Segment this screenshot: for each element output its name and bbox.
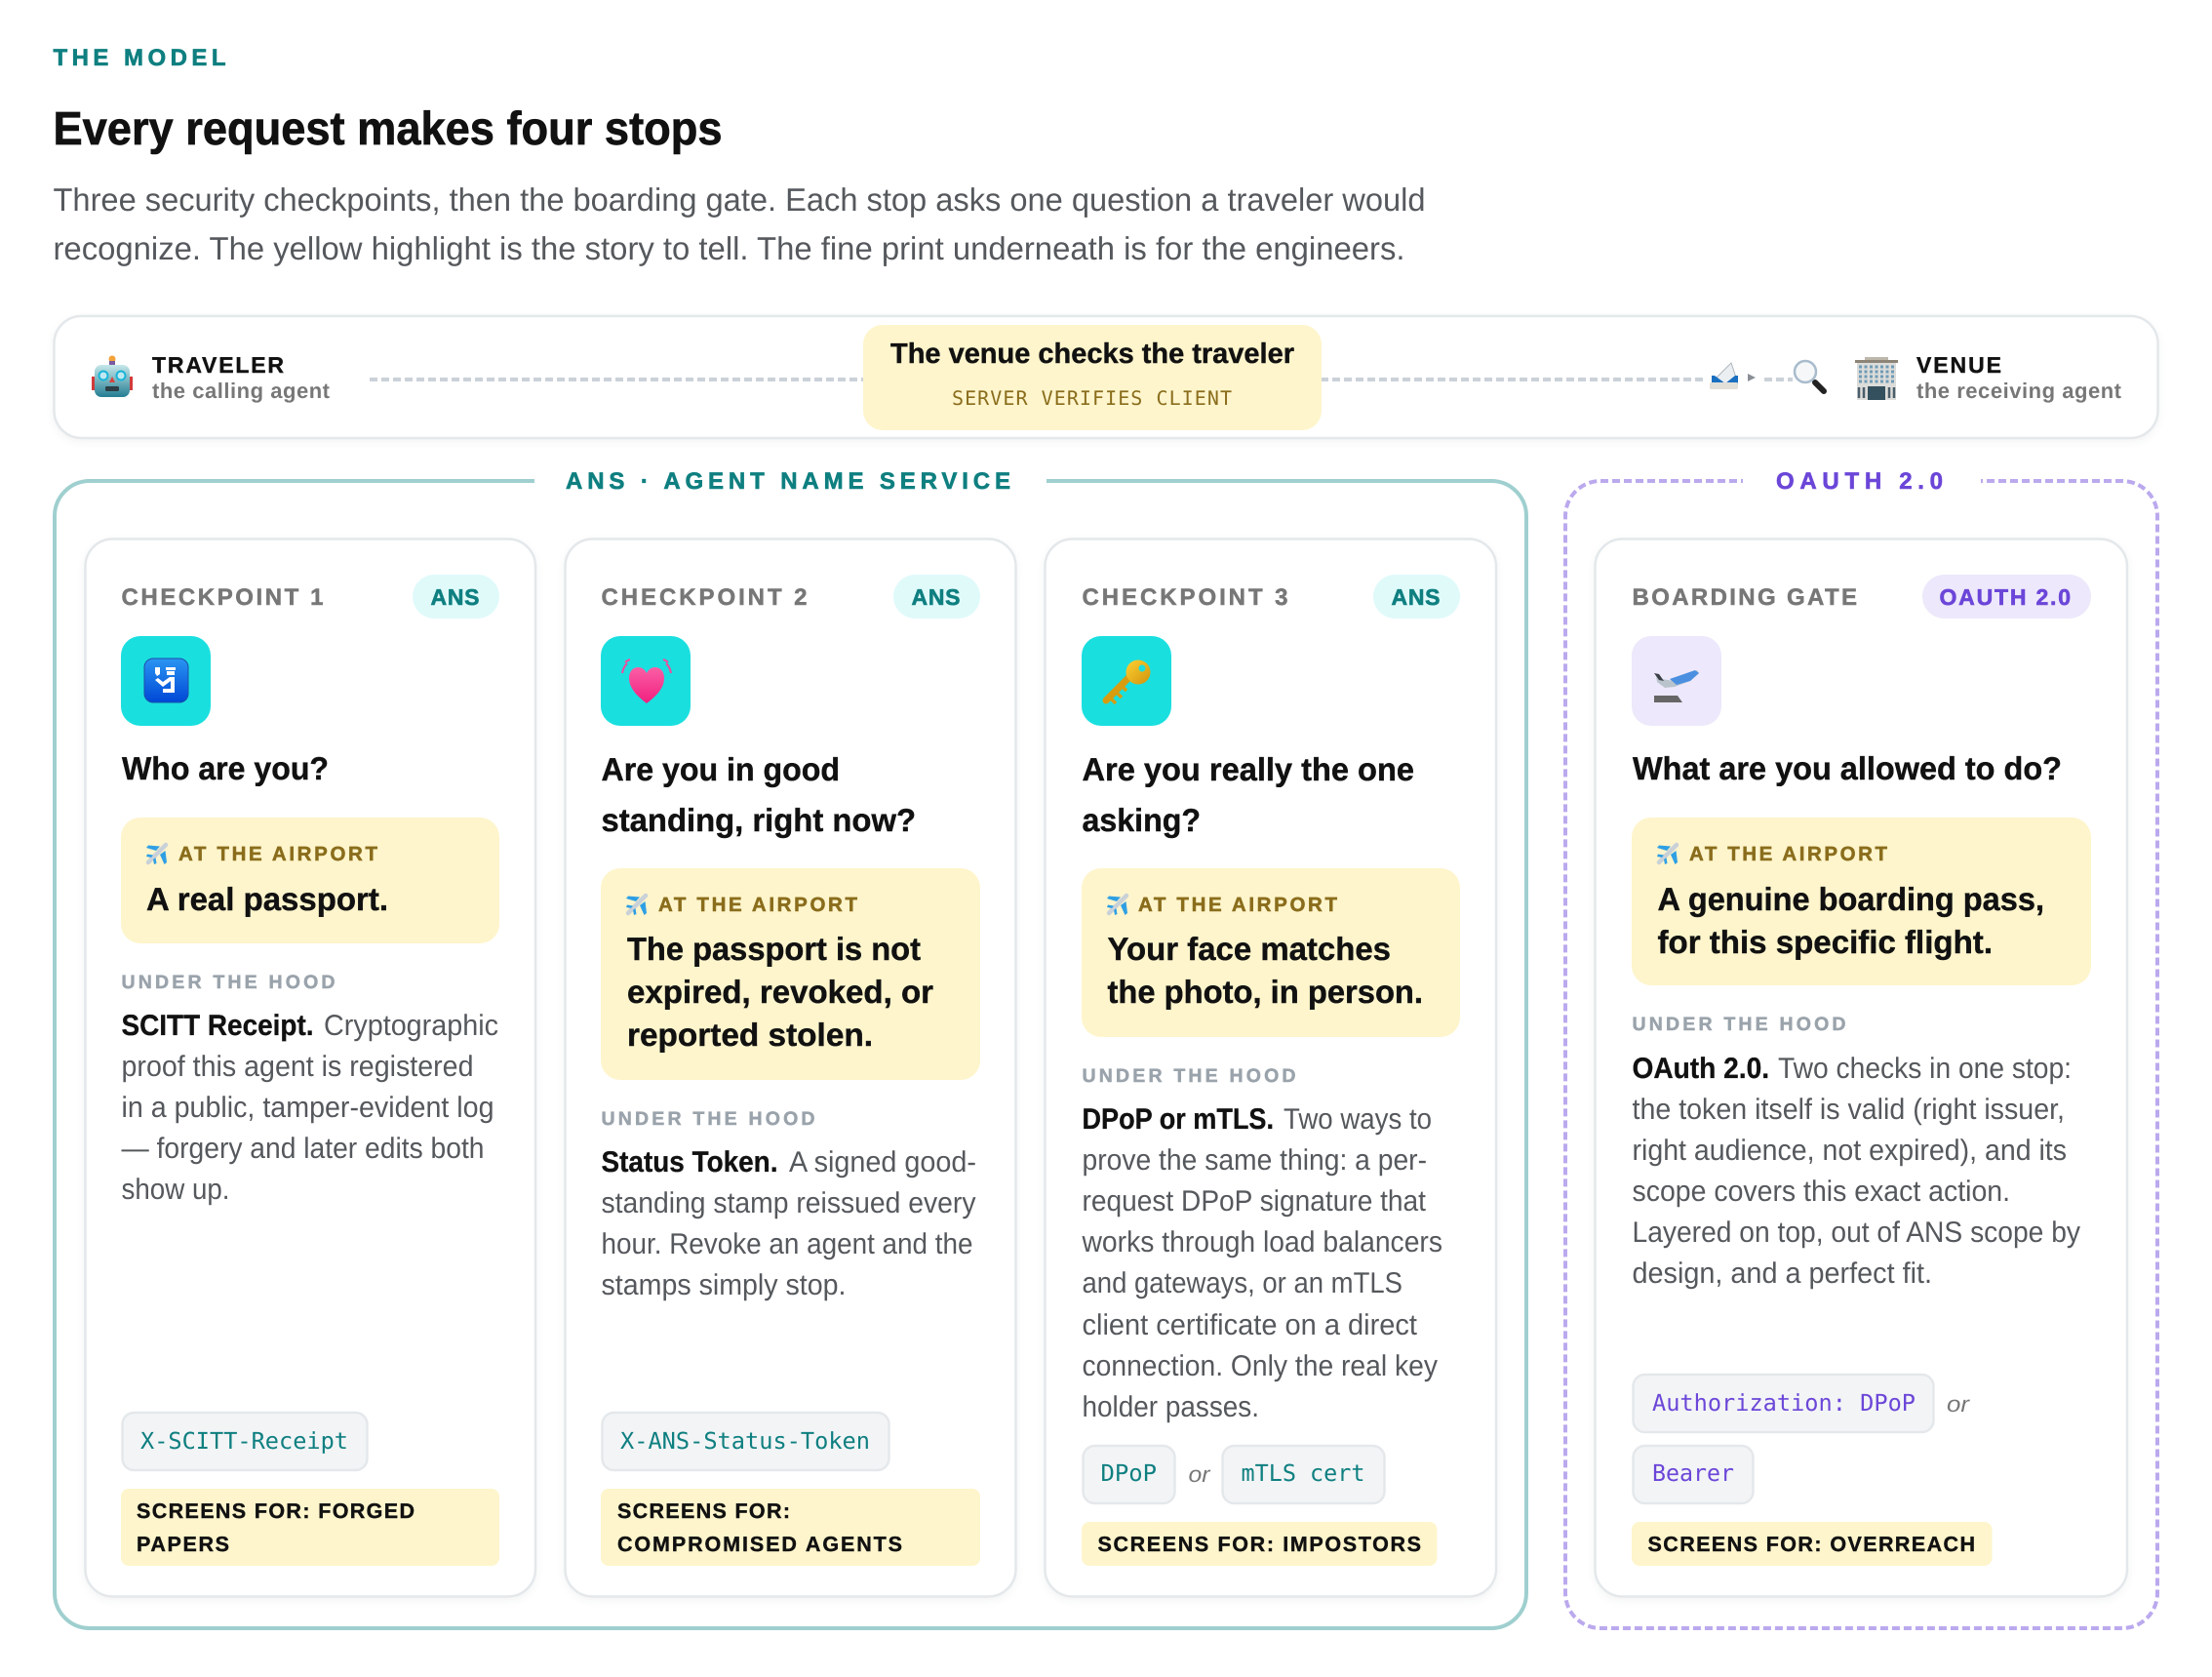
chip: Bearer: Bearer	[1652, 1459, 1734, 1487]
callout: at the airport: AT THE AIRPORT	[658, 894, 857, 916]
dash to magnifier	[1764, 378, 1793, 381]
under the hood text: Layered on top, out of ANS scope by	[1633, 1217, 2080, 1249]
under the hood text: Status Token.	[601, 1146, 778, 1178]
question: Who are you?	[122, 750, 329, 786]
under the hood text	[601, 1146, 976, 1301]
badge: ANS: ANS	[911, 584, 960, 610]
panel: OAuth group frame	[1565, 468, 2157, 1628]
chip: header name	[603, 1413, 889, 1470]
under the hood heading: UNDER THE HOOD	[1083, 1065, 1295, 1087]
icon: airplane	[1657, 845, 1678, 864]
under the hood text: Two ways to	[1284, 1103, 1432, 1136]
icon: airplane arrival	[1632, 636, 1721, 726]
under the hood text: SCITT Receipt.	[121, 1010, 314, 1042]
venue sublabel: the receiving agent	[1916, 379, 2122, 403]
intro paragraph	[53, 181, 1426, 266]
under the hood text: right audience, not expired), and its	[1633, 1135, 2067, 1167]
under the hood text: the token itself is valid (right issuer,	[1633, 1094, 2065, 1126]
callout: at the airport: AT THE AIRPORT	[178, 843, 377, 865]
chip: mTLS cert: mTLS cert	[1241, 1459, 1365, 1487]
icon: airplane	[626, 896, 647, 915]
callout: at the airport: The passport is not	[627, 931, 921, 967]
callout: the venue checks the traveler: The venue checks the traveler	[890, 339, 1294, 370]
tag: screens for: SCREENS FOR: FORGED	[137, 1499, 415, 1523]
under the hood text: show up.	[121, 1174, 230, 1206]
under the hood heading: UNDER THE HOOD	[1633, 1014, 1845, 1035]
badge: ANS	[413, 575, 499, 619]
traveler label: TRAVELER	[152, 352, 284, 378]
panel: checkpoint 1	[86, 539, 535, 1596]
tag: screens for: SCREENS FOR: OVERREACH	[1648, 1533, 1975, 1556]
chip: DPoP: DPoP	[1100, 1459, 1157, 1487]
question: Are you really the one	[1083, 751, 1414, 787]
panel: boarding gate	[1596, 539, 2127, 1596]
under the hood text: request DPoP signature that	[1083, 1185, 1427, 1218]
title: Every request makes four stops	[53, 103, 722, 155]
chip: header name: X-SCITT-Receipt	[140, 1427, 348, 1455]
icon: passport control	[121, 636, 211, 726]
under the hood text: hour. Revoke an agent and the	[601, 1228, 973, 1260]
traveler sublabel: the calling agent	[152, 379, 331, 403]
tag: screens for: SCREENS FOR: IMPOSTORS	[1098, 1533, 1421, 1556]
badge: OAuth 2.0: OAUTH 2.0	[1939, 584, 2071, 610]
venue label: VENUE	[1916, 352, 2001, 378]
chip: header name	[123, 1413, 367, 1470]
intro paragraph: Three security checkpoints, then the boarding gate. Each stop asks one question a traveler would	[53, 181, 1426, 218]
callout: at the airport	[1632, 818, 2091, 985]
callout: at the airport: the photo, in person.	[1108, 974, 1423, 1010]
question: Are you in good	[601, 751, 840, 787]
checkpoint 2 label: CHECKPOINT 2	[601, 584, 808, 611]
under the hood text: works through load balancers	[1082, 1226, 1442, 1258]
arrowhead	[1748, 374, 1756, 381]
checkpoint 1 label: CHECKPOINT 1	[121, 584, 324, 611]
under the hood text: OAuth 2.0.	[1633, 1053, 1769, 1085]
badge: ANS: ANS	[431, 584, 480, 610]
under the hood text	[1082, 1103, 1442, 1423]
badge: ANS	[1373, 575, 1460, 619]
callout: at the airport: Your face matches	[1108, 931, 1391, 967]
boarding gate label: BOARDING GATE	[1633, 584, 1857, 611]
callout: at the airport: reported stolen.	[627, 1017, 873, 1053]
chip: Bearer	[1633, 1446, 1754, 1503]
under the hood text	[1633, 1053, 2080, 1290]
callout: at the airport: A real passport.	[146, 881, 388, 917]
under the hood text: — forgery and later edits both	[121, 1133, 484, 1165]
callout: the venue checks the traveler: SERVER VERIFIES CLIENT	[952, 386, 1232, 410]
callout: at the airport	[121, 818, 499, 943]
or: or	[1188, 1461, 1211, 1487]
tag: screens for: SCREENS FOR:	[617, 1499, 790, 1523]
callout: at the airport: AT THE AIRPORT	[1689, 843, 1887, 865]
icon: beating heart	[601, 636, 691, 726]
dashed path left	[370, 378, 864, 381]
chip: Authorization: DPoP: Authorization: DPoP	[1652, 1389, 1916, 1417]
under the hood text: holder passes.	[1083, 1391, 1259, 1423]
chip: mTLS cert	[1223, 1446, 1385, 1503]
under the hood text: stamps simply stop.	[601, 1269, 847, 1301]
icon: office building	[1855, 357, 1898, 400]
icon: robot traveler	[92, 355, 133, 397]
under the hood text: standing stamp reissued every	[601, 1187, 975, 1219]
ANS group label: ANS · AGENT NAME SERVICE	[566, 468, 1010, 495]
under the hood text: Two checks in one stop:	[1778, 1053, 2072, 1085]
under the hood text: design, and a perfect fit.	[1633, 1258, 1932, 1290]
panel: request flow strip	[55, 316, 2157, 438]
icon: airplane	[1107, 896, 1127, 915]
dashed path right	[1321, 378, 1707, 381]
badge: ANS: ANS	[1391, 584, 1440, 610]
icon: key	[1082, 636, 1171, 726]
tag: screens for	[1082, 1522, 1438, 1566]
icon: magnifier	[1795, 361, 1824, 391]
under the hood text: connection. Only the real key	[1083, 1350, 1438, 1382]
callout: at the airport: AT THE AIRPORT	[1138, 894, 1337, 916]
callout: the venue checks the traveler	[863, 325, 1322, 430]
chip: header name: X-ANS-Status-Token	[620, 1427, 870, 1455]
question: standing, right now?	[601, 802, 916, 838]
question: asking?	[1083, 802, 1201, 838]
tag: screens for: COMPROMISED AGENTS	[617, 1533, 902, 1556]
OAuth group label: OAUTH 2.0	[1776, 468, 1943, 495]
under the hood text: client certificate on a direct	[1083, 1309, 1418, 1341]
callout: at the airport	[601, 868, 980, 1080]
under the hood text: Cryptographic	[324, 1010, 498, 1042]
icon: envelope in tray	[1710, 363, 1738, 389]
tag: screens for	[121, 1489, 499, 1566]
callout: at the airport: expired, revoked, or	[627, 974, 933, 1010]
under the hood heading: UNDER THE HOOD	[601, 1108, 815, 1130]
question	[601, 751, 916, 838]
panel: checkpoint 2	[566, 539, 1016, 1596]
tag: screens for	[601, 1489, 980, 1566]
panel: ANS group frame	[55, 468, 1526, 1628]
eyebrow: the model: THE MODEL	[53, 45, 226, 71]
badge: OAuth 2.0	[1922, 575, 2091, 619]
intro paragraph: recognize. The yellow highlight is the story to tell. The fine print underneath is for the engineers.	[53, 230, 1404, 266]
icon: airplane	[146, 845, 167, 864]
under the hood text	[121, 1010, 498, 1206]
under the hood text: proof this agent is registered	[121, 1051, 474, 1083]
under the hood text: prove the same thing: a per-	[1083, 1144, 1427, 1177]
under the hood text: in a public, tamper-evident log	[121, 1092, 494, 1124]
checkpoint 3 label: CHECKPOINT 3	[1083, 584, 1287, 611]
callout: at the airport: A genuine boarding pass,	[1658, 881, 2044, 917]
badge: ANS	[893, 575, 980, 619]
under the hood heading: UNDER THE HOOD	[121, 972, 336, 993]
chip: DPoP	[1083, 1446, 1174, 1503]
question	[1083, 751, 1414, 838]
callout: at the airport	[1082, 868, 1460, 1037]
tag: screens for: PAPERS	[137, 1533, 229, 1556]
panel: checkpoint 3	[1046, 539, 1496, 1596]
or: or	[1947, 1391, 1971, 1417]
callout: at the airport: for this specific flight.	[1658, 924, 1993, 960]
under the hood text: DPoP or mTLS.	[1083, 1103, 1274, 1136]
under the hood text: scope covers this exact action.	[1633, 1176, 2010, 1208]
under the hood text: and gateways, or an mTLS	[1083, 1267, 1402, 1299]
chip: Authorization: DPoP	[1633, 1375, 1933, 1432]
under the hood text: A signed good-	[789, 1146, 976, 1178]
tag: screens for	[1632, 1522, 1992, 1566]
question: What are you allowed to do?	[1633, 750, 2062, 786]
